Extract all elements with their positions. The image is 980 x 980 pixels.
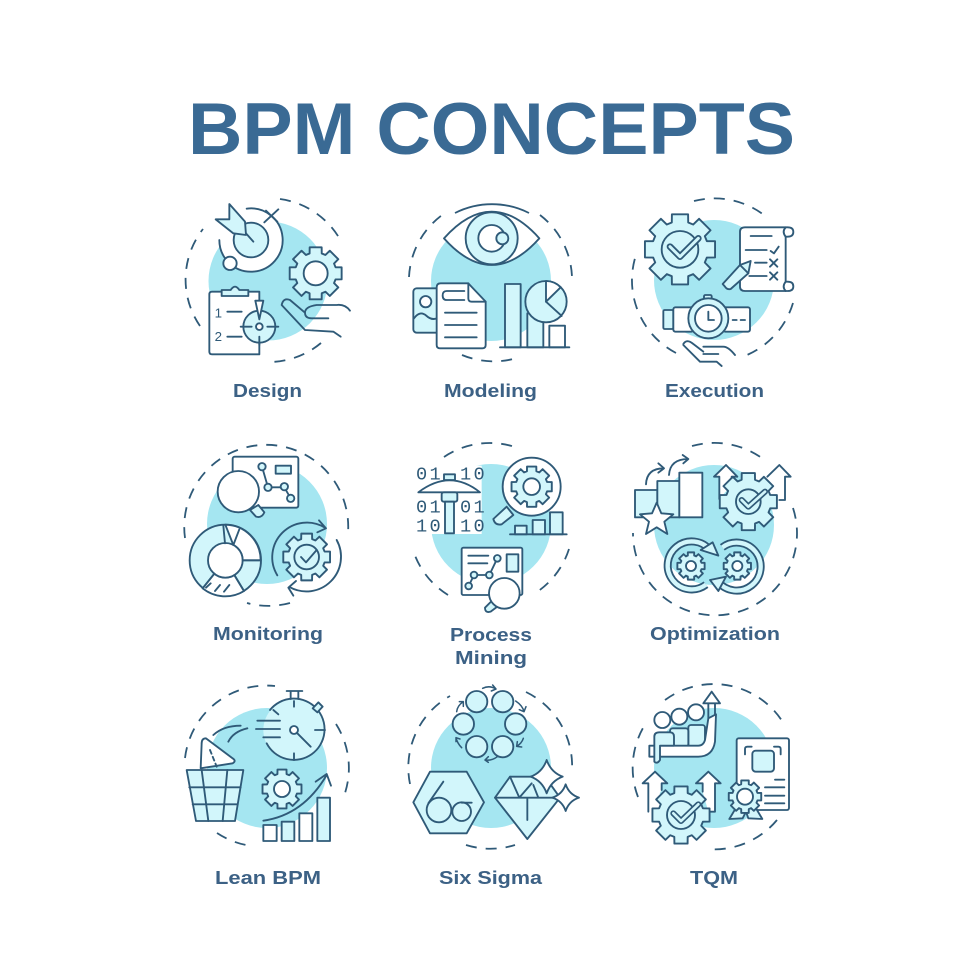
icon: cycle of circles, sigma hexagon and diamond <box>413 685 579 839</box>
title: BPM CONCEPTS <box>188 89 795 170</box>
panel: Process Mining <box>413 443 569 668</box>
dashed ring <box>633 684 784 849</box>
icon: binary pickaxe, magnifier and chart panel: 01 <box>416 496 443 518</box>
icon: binary pickaxe, magnifier and chart panel: 01 <box>416 463 443 485</box>
panel: Execution <box>632 198 793 401</box>
icon: gear, checklist, watch and hand <box>645 214 793 366</box>
label: Modeling <box>444 380 537 401</box>
background circle <box>431 221 551 341</box>
panel: TQM <box>633 684 789 888</box>
panel: Six Sigma <box>408 685 579 888</box>
dashed ring <box>408 692 572 849</box>
label: Optimization <box>650 623 780 644</box>
icon: binary pickaxe, magnifier and chart panel: 10 <box>460 463 487 485</box>
label line 2: Mining <box>455 647 527 668</box>
dashed ring <box>185 686 349 846</box>
panel: Design <box>186 199 350 401</box>
panel: Monitoring <box>184 445 348 644</box>
dashed ring <box>413 443 569 595</box>
icon: eye, document and charts <box>413 212 569 348</box>
icon: binary pickaxe, magnifier and chart panel <box>416 458 567 612</box>
icon: stopwatch, waste basket, gear and growth bars <box>187 691 331 841</box>
label: Monitoring <box>213 623 323 644</box>
icon: target, gear, clipboard and hand: 2 <box>215 329 222 344</box>
label: Lean BPM <box>215 867 321 888</box>
dashed ring <box>633 443 797 615</box>
label: Design <box>233 380 302 401</box>
background circle <box>654 465 774 585</box>
icon: binary pickaxe, magnifier and chart panel: 10 <box>416 516 443 538</box>
panel: Optimization <box>633 443 797 644</box>
label: Process <box>450 624 532 645</box>
background circle <box>654 220 774 340</box>
background circle <box>207 708 327 828</box>
dashed ring <box>632 198 793 355</box>
background circle <box>654 708 774 828</box>
dashed ring <box>184 445 348 606</box>
icon: bars, star, gears and infinity loop <box>635 455 791 591</box>
label: TQM <box>690 867 738 888</box>
label: Execution <box>665 380 764 401</box>
background circle <box>208 222 328 340</box>
panel: Modeling <box>409 204 572 401</box>
icon: team, certificate and gear <box>643 692 789 844</box>
dashed ring <box>186 199 342 362</box>
background circle <box>431 708 551 828</box>
icon: binary pickaxe, magnifier and chart panel: 01 <box>460 496 487 518</box>
background circle <box>431 464 551 584</box>
label: Six Sigma <box>439 867 543 888</box>
icon: target, gear, clipboard and hand: 1 <box>215 305 222 320</box>
top arc <box>455 204 529 213</box>
dashed ring <box>409 213 572 361</box>
background circle <box>207 464 327 584</box>
icon: binary pickaxe, magnifier and chart panel: 10 <box>460 516 487 538</box>
icon: target, gear, clipboard and hand <box>209 204 350 354</box>
panel: Lean BPM <box>185 686 349 888</box>
icon: dashboard, donut chart and gear cycle <box>190 457 341 596</box>
